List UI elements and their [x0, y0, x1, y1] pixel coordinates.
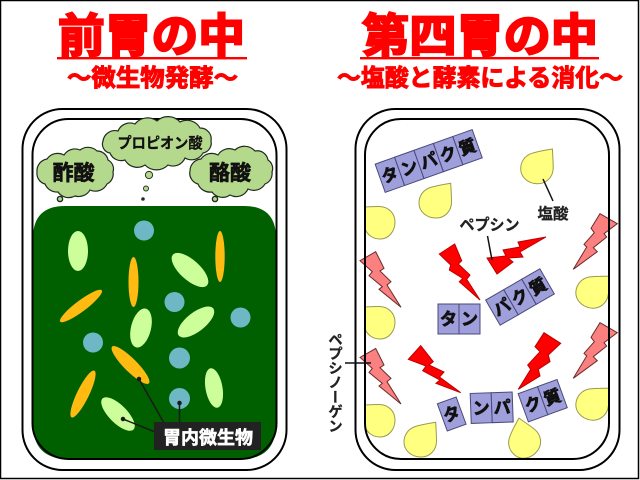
protein fragment: ンパ: パ	[493, 398, 511, 418]
protein fragment: タ: タ	[441, 403, 463, 426]
stomach inner wall	[32, 119, 276, 459]
title: 前胃の中: 前胃の中	[58, 10, 245, 62]
subtitle: 微生物発酵: ～微生物発酵～	[67, 65, 238, 92]
protein block: タンパク質: タ	[379, 163, 401, 187]
protein fragment: ンパ	[470, 392, 513, 423]
label: 塩酸: 塩酸	[538, 205, 569, 223]
title: 第四胃の中: 第四胃の中	[362, 10, 598, 62]
protein fragment: パク質: パ	[490, 295, 514, 320]
label: ペプシン: ペプシン	[460, 216, 520, 234]
stomach outer wall	[22, 109, 286, 470]
protein fragment: タ	[437, 397, 466, 431]
label: 胃内微生物: 胃内微生物	[163, 428, 253, 448]
green rumen fluid	[33, 206, 276, 459]
protein fragment: タン: ン	[461, 310, 478, 329]
pepsinogen bolts (pink)	[360, 214, 617, 404]
panel: rumen	[22, 109, 286, 470]
cloud: acetic acid: 酢酸	[52, 162, 94, 185]
cloud: acetic acid	[37, 147, 113, 202]
pepsin bolts (red)	[408, 237, 561, 393]
microbes: orange rods	[57, 231, 225, 420]
protein block: タンパク質: 質	[456, 136, 479, 159]
label: 塩酸	[538, 179, 569, 223]
label: 胃内微生物	[154, 422, 261, 450]
leader lines to microbe label	[122, 378, 181, 432]
protein block: タンパク質: ン	[398, 157, 421, 180]
microbes: blue cocci	[83, 220, 250, 409]
protein fragment: ク質: 質	[541, 386, 564, 409]
cloud: butyric acid	[190, 146, 273, 202]
protein fragment: ク質: ク	[522, 393, 544, 417]
protein fragment: タン: タ	[440, 310, 457, 329]
protein fragment: パク質	[486, 269, 554, 325]
cloud: propionic acid	[102, 117, 211, 170]
protein block: タンパク質: ク	[437, 143, 459, 166]
protein fragment: タン	[438, 304, 480, 334]
hydrochloric acid drops	[360, 149, 611, 464]
microbes: pale green rods	[68, 231, 226, 436]
stomach outer wall	[356, 109, 620, 470]
protein fragment: パク質: 質	[526, 275, 550, 299]
protein block: タンパク質: パ	[418, 150, 440, 173]
protein fragment: パク質: ク	[508, 285, 532, 310]
cloud: butyric acid: 酪酸	[209, 162, 251, 185]
gas bubbles	[142, 171, 153, 200]
protein fragment: ク質	[518, 380, 567, 422]
cloud: propionic acid: プロピオン酸	[118, 134, 202, 152]
label: ペプシノーゲン: ペプシノーゲン	[326, 332, 342, 433]
protein block: タンパク質	[375, 130, 482, 192]
label: ペプシノーゲン	[326, 332, 371, 433]
stomach inner wall	[365, 119, 609, 459]
label: ペプシン	[460, 216, 520, 260]
protein fragment: ンパ: ン	[472, 399, 490, 418]
panel: abomasum	[326, 109, 620, 470]
subtitle: 塩酸と酵素による消化: ～塩酸と酵素による消化～	[337, 65, 623, 92]
